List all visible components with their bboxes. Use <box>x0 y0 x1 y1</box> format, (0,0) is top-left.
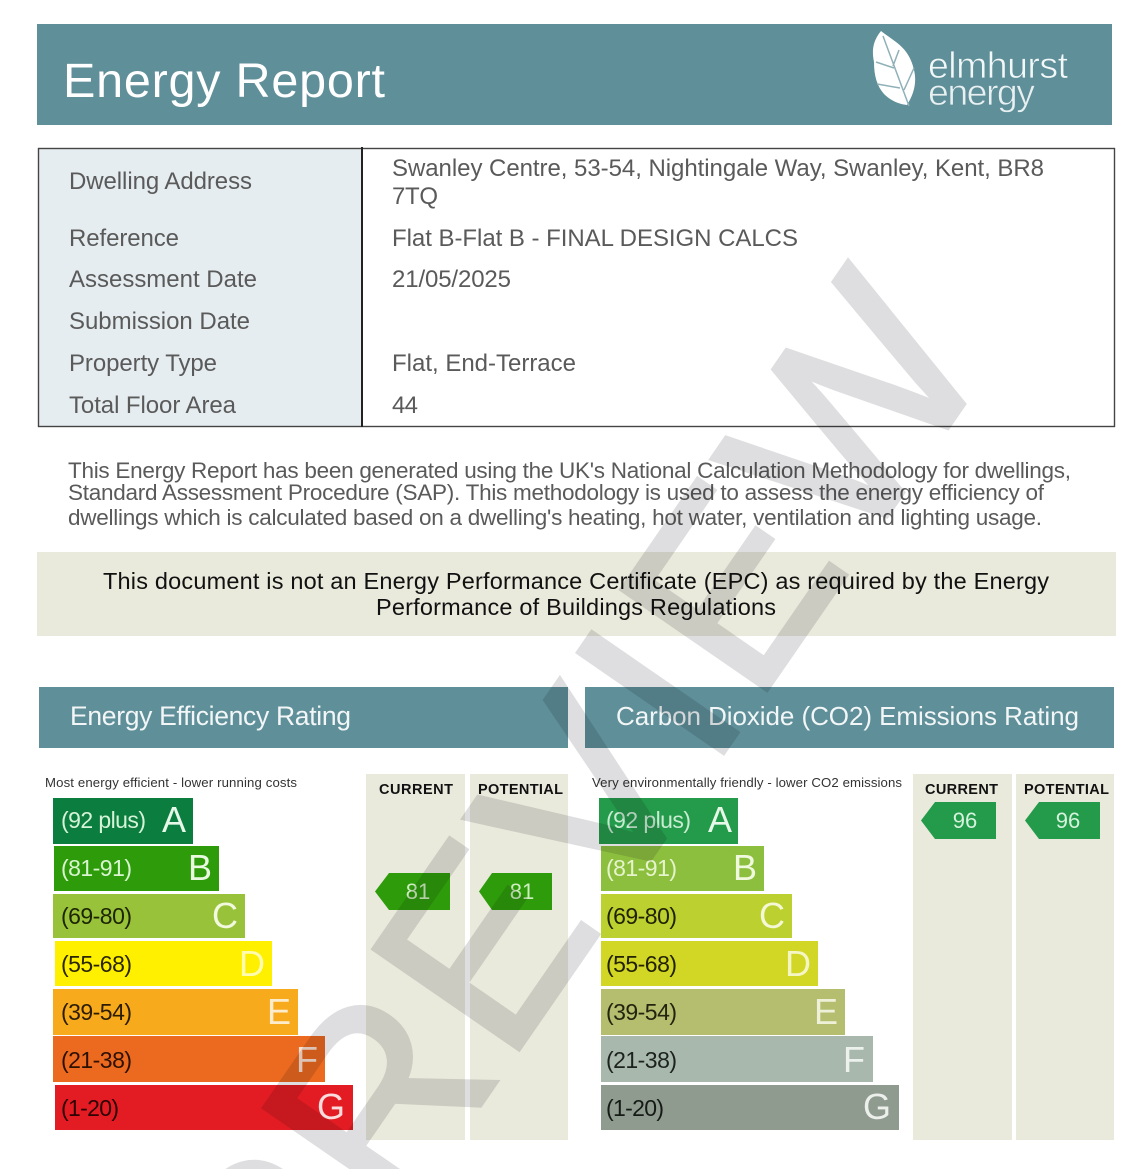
band C: C <box>212 895 238 936</box>
chart caption: Most energy efficient - lower running costs <box>45 775 297 790</box>
band C <box>53 894 245 938</box>
band C: C <box>759 895 785 936</box>
chart: CO2 emissions rating <box>592 774 1114 1140</box>
logo: elmhurst energy: elmhurst <box>928 44 1069 86</box>
band G: G <box>317 1086 345 1127</box>
band E: (39-54) <box>61 999 132 1025</box>
band B: B <box>188 847 212 888</box>
row: submission date: Submission Date <box>69 308 250 335</box>
column: current <box>366 774 465 1140</box>
band A <box>599 798 738 844</box>
band E: E <box>267 991 291 1032</box>
band A: A <box>162 799 186 840</box>
heading: energy efficiency rating: Energy Efficiency Rating <box>70 701 351 731</box>
band C: (69-80) <box>61 903 132 929</box>
text block: methodology description: Standard Assessment Procedure (SAP). This methodology is used to assess the energy efficiency of <box>68 480 1045 505</box>
band A: A <box>708 799 732 840</box>
band F: F <box>843 1039 865 1080</box>
row: total floor area: Total Floor Area <box>69 392 237 419</box>
band F <box>601 1036 873 1082</box>
band F <box>53 1036 325 1082</box>
band C <box>601 894 792 938</box>
row: reference: Reference <box>69 225 179 252</box>
band B: (81-91) <box>606 855 677 881</box>
band D: D <box>239 943 265 984</box>
band B <box>54 846 219 891</box>
logo: elmhurst energy <box>873 31 1069 113</box>
header banner <box>37 24 1112 125</box>
band G: G <box>863 1086 891 1127</box>
column: current: CURRENT <box>925 782 998 798</box>
chart: energy efficiency rating <box>45 774 568 1140</box>
row: total floor area: 44 <box>392 392 418 419</box>
column: potential <box>1016 774 1114 1140</box>
band D: (55-68) <box>61 951 132 977</box>
column: current: CURRENT <box>379 782 453 798</box>
band F: F <box>296 1039 318 1080</box>
band D: D <box>785 943 811 984</box>
row: assessment date <box>69 266 511 293</box>
row: dwelling address: Dwelling Address <box>69 168 252 195</box>
band A: (92 plus) <box>606 807 691 833</box>
row: assessment date: 21/05/2025 <box>392 266 511 293</box>
title: Energy Report <box>63 54 386 108</box>
marker: current 96 <box>921 802 996 839</box>
row: dwelling address: Swanley Centre, 53-54, Nightingale Way, Swanley, Kent, BR8 <box>392 155 1044 182</box>
marker: potential 81 <box>479 873 552 910</box>
callout: not an EPC notice: Performance of Buildings Regulations <box>376 594 776 620</box>
band C: (69-80) <box>606 903 677 929</box>
marker: current 81: 81 <box>406 879 430 904</box>
callout: not an EPC notice: This document is not an Energy Performance Certificate (EPC) as required by the Energy <box>103 568 1049 594</box>
chart caption: Very environmentally friendly - lower CO2 emissions <box>592 775 902 790</box>
band B: (81-91) <box>61 855 132 881</box>
heading: energy efficiency rating <box>39 687 568 748</box>
row: assessment date: Assessment Date <box>69 266 257 293</box>
panel: dwelling details table <box>38 147 1114 427</box>
marker: potential 96: 96 <box>1056 808 1080 833</box>
band E <box>601 989 845 1035</box>
band A <box>53 798 193 844</box>
band G: (1-20) <box>606 1095 664 1121</box>
text block: methodology description <box>68 458 1071 530</box>
logo: elmhurst energy: energy <box>928 71 1035 113</box>
marker: potential 96 <box>1025 802 1100 839</box>
row: property type: Property Type <box>69 350 217 377</box>
text block: methodology description: This Energy Report has been generated using the UK's National Calculation Methodology for dwellings, <box>68 458 1071 483</box>
heading: carbon dioxide emissions rating: Carbon Dioxide (CO2) Emissions Rating <box>616 701 1079 731</box>
row: dwelling address: 7TQ <box>392 183 438 210</box>
band D <box>601 941 818 986</box>
row: dwelling address <box>69 155 1044 210</box>
row: property type: Flat, End-Terrace <box>392 350 576 377</box>
icon: leaf <box>873 31 915 106</box>
marker: potential 81: 81 <box>510 879 534 904</box>
band B: B <box>733 847 757 888</box>
column: potential: POTENTIAL <box>1024 782 1109 798</box>
callout: not an EPC notice <box>37 552 1116 636</box>
band F: (21-38) <box>606 1047 677 1073</box>
band E <box>53 989 298 1035</box>
band D: (55-68) <box>606 951 677 977</box>
band G <box>601 1085 899 1130</box>
column: potential <box>470 774 568 1140</box>
marker: current 96: 96 <box>953 808 977 833</box>
row: reference: Flat B-Flat B - FINAL DESIGN CALCS <box>392 225 798 252</box>
row: property type <box>69 350 576 377</box>
column: current <box>913 774 1012 1140</box>
band G <box>55 1085 353 1130</box>
heading: carbon dioxide emissions rating <box>585 687 1114 748</box>
band B <box>601 846 764 891</box>
row: total floor area <box>69 392 418 419</box>
band E: (39-54) <box>606 999 677 1025</box>
band G: (1-20) <box>61 1095 119 1121</box>
band A: (92 plus) <box>61 807 146 833</box>
band D <box>55 941 272 986</box>
band F: (21-38) <box>61 1047 132 1073</box>
column: potential: POTENTIAL <box>478 782 563 798</box>
text block: methodology description: dwellings which is calculated based on a dwelling's heating, hot water, ventilation and lighting usage. <box>68 505 1042 530</box>
row: reference <box>69 225 798 252</box>
marker: current 81 <box>375 873 450 910</box>
band E: E <box>814 991 838 1032</box>
